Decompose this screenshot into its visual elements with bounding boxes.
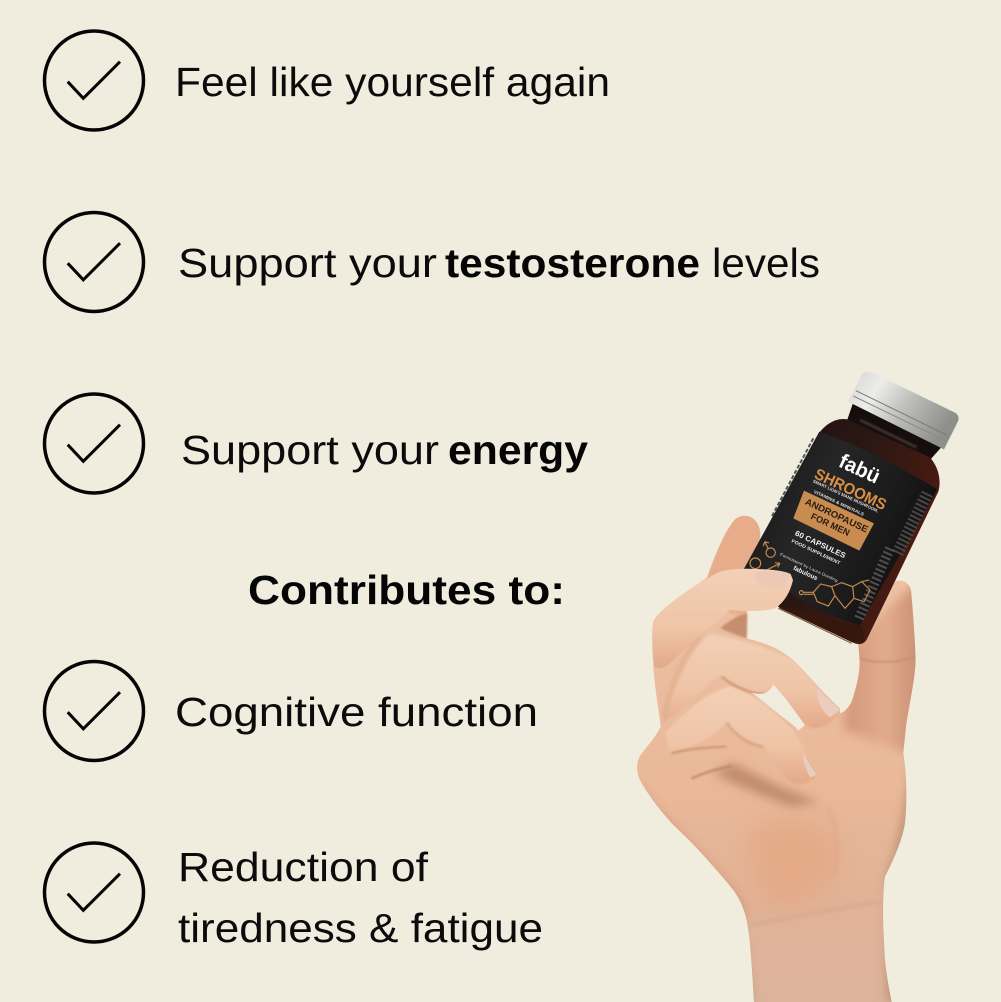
benefit row: support testosterone [44, 212, 820, 312]
text: cognitive function: Cognitive function [175, 689, 538, 735]
capsule count: 60 CAPSULES [794, 529, 847, 560]
knuckle creases [722, 677, 767, 694]
male symbols [750, 542, 780, 570]
text: reduction of tiredness and fatigue: tiredness & fatigue [178, 905, 543, 951]
fabulous logo: fabulous [792, 565, 819, 582]
text: support your testosterone levels [178, 240, 820, 286]
orange label box: ANDROPAUSE [804, 497, 870, 535]
palm lower-left edge shade [650, 795, 746, 912]
right side info panel [897, 493, 927, 555]
text: support your energy: energy [448, 427, 588, 473]
back finger [704, 516, 760, 615]
index finger over bottle [652, 569, 793, 668]
thumb crease [860, 658, 906, 664]
benefit row: reduction of tiredness and fatigue [44, 843, 543, 951]
food supplement: FOOD SUPPLEMENT [791, 538, 841, 566]
orange label box [793, 491, 874, 551]
formulated by: Formulated by Laura Dowling [779, 552, 839, 583]
brand logo: fabü [835, 450, 884, 489]
bottle label [743, 432, 937, 626]
text: support your energy: Support your [181, 427, 439, 473]
text: support your testosterone levels: testosterone [445, 240, 700, 286]
thumb [840, 585, 916, 754]
fingernail: index finger [755, 571, 791, 587]
bottle [743, 372, 959, 644]
hand base silhouette [637, 516, 916, 1002]
middle finger [662, 634, 840, 728]
icon: check circle [44, 394, 144, 493]
molecule line art [799, 580, 870, 608]
benefit row: cognitive function [44, 662, 538, 760]
text: support your testosterone levels: Support your [178, 240, 437, 286]
text: feel like yourself again: Feel like yourself again [175, 59, 610, 105]
benefit row: support energy [44, 394, 588, 493]
bottle cap [848, 372, 959, 449]
product descriptor: VITAMINS & MINERALS [813, 489, 865, 517]
fingernail: ring finger [803, 753, 817, 777]
benefit row: feel like yourself again [44, 31, 610, 130]
bottle glass body [743, 419, 940, 644]
palm right edge shade [882, 778, 906, 1002]
text: support your testosterone levels: levels [712, 240, 820, 286]
capsules band [780, 605, 865, 642]
text: reduction of tiredness and fatigue: Reduction of [178, 844, 429, 890]
wrist left edge shade [752, 978, 755, 999]
fingernail: middle finger [817, 689, 840, 717]
product name: SHROOMS [812, 466, 889, 514]
icon: check circle [44, 212, 144, 312]
heading: contributes to: Contributes to: [248, 567, 565, 613]
shadow under index finger [720, 613, 747, 638]
text: support your energy [181, 427, 588, 473]
icon: check circle [44, 843, 144, 942]
palm heel warmth [750, 818, 834, 902]
wrist crease [820, 902, 874, 912]
ring finger [665, 687, 817, 784]
icon: check circle [44, 31, 144, 130]
shadow under ring finger [713, 763, 820, 807]
product descriptor: SMART LION'S MANE MUSHROOM, [812, 479, 879, 513]
gap between fingers [752, 684, 805, 731]
text: reduction of tiredness and fatigue [178, 844, 543, 951]
hand holding bottle [637, 516, 916, 1002]
orange label box: FOR MEN [809, 511, 851, 538]
bottle neck [847, 400, 943, 460]
icon: check circle [44, 662, 144, 760]
